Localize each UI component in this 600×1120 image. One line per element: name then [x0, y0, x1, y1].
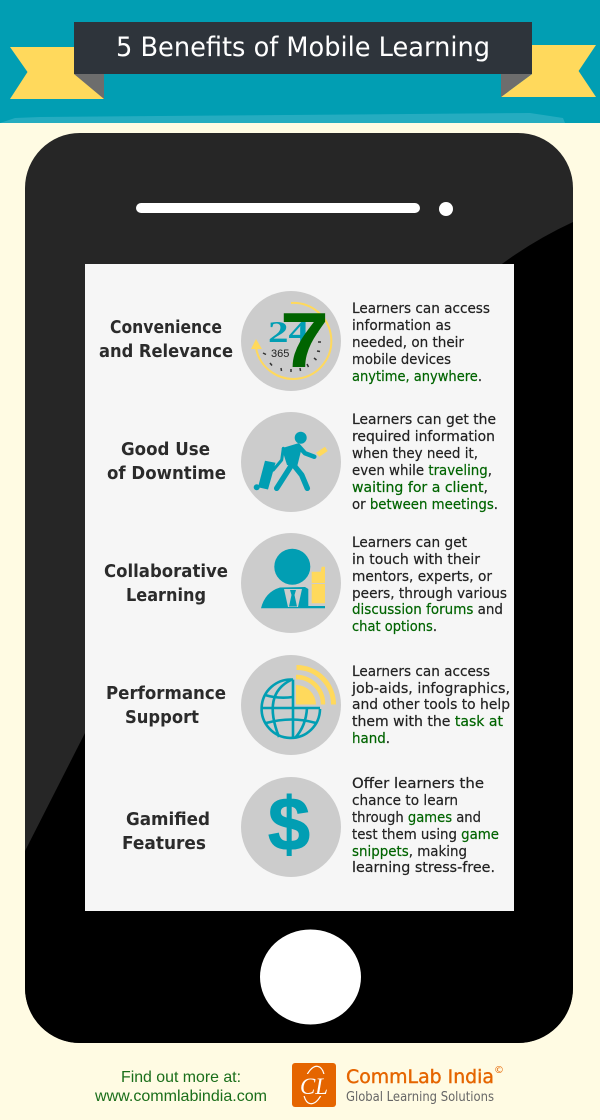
icon: person with phone: [241, 533, 341, 633]
logo wordmark: CommLab India: [346, 1066, 494, 1088]
description: [351, 664, 510, 747]
description: peers, through various: [352, 586, 507, 602]
title banner: 5 Benefits of Mobile Learning: [116, 32, 490, 63]
icon: 24/7/365 clock: [241, 291, 341, 391]
description: learning stress-free.: [352, 860, 495, 876]
heading: and Relevance: [99, 341, 233, 362]
description: chance to learn: [352, 793, 458, 809]
heading: [106, 683, 226, 728]
description: through games and: [352, 810, 481, 826]
logo mark: [292, 1063, 336, 1107]
heading: Support: [125, 707, 199, 728]
phone speaker: [136, 203, 420, 213]
description: [352, 776, 499, 876]
description: test them using game: [352, 827, 499, 843]
description: even while traveling,: [352, 463, 492, 479]
description: needed, on their: [352, 335, 464, 351]
description: chat options.: [352, 619, 437, 635]
footer link text: Find out more at:: [121, 1069, 241, 1086]
icon: globe with signal waves: [241, 655, 341, 755]
heading: [107, 439, 226, 484]
footer link text: [94, 1069, 267, 1105]
heading: [104, 561, 228, 606]
header band: [0, 0, 600, 123]
left ribbon tail: [10, 47, 104, 99]
benefit 1: convenience and relevance: [99, 291, 490, 391]
icon: dollar sign: $: [268, 782, 310, 866]
benefit 4: performance support: [106, 655, 510, 755]
title banner: [74, 22, 532, 74]
CommLab India logo: [292, 1063, 504, 1107]
phone body: [25, 133, 573, 1043]
description: [352, 412, 498, 513]
icon: 24/7/365 clock: 365: [271, 348, 289, 360]
description: hand.: [352, 731, 390, 747]
description: mobile devices: [352, 352, 451, 368]
icon: traveller with suitcase: [241, 412, 341, 512]
description: job-aids, infographics,: [351, 681, 510, 697]
description: them with the task at: [352, 714, 504, 730]
description: and other tools to help: [352, 697, 510, 713]
icon: 24/7/365 clock: 7: [280, 296, 329, 384]
icon: dollar sign: [241, 777, 341, 877]
heading: of Downtime: [107, 463, 226, 484]
heading: Gamified: [126, 809, 210, 830]
description: information as: [352, 318, 451, 334]
right ribbon tail: [501, 45, 596, 97]
description: discussion forums and: [352, 602, 503, 618]
description: in touch with their: [352, 552, 480, 568]
description: mentors, experts, or: [352, 569, 492, 585]
description: when they need it,: [352, 446, 478, 462]
description: [352, 535, 507, 635]
logo wordmark: Global Learning Solutions: [346, 1090, 494, 1105]
heading: Good Use: [121, 439, 210, 460]
benefit 3: collaborative learning: [104, 533, 507, 635]
description: snippets, making: [352, 844, 467, 860]
heading: [122, 809, 210, 854]
title ribbon: [10, 22, 596, 99]
benefit 2: good use of downtime: [107, 412, 498, 513]
phone home button: [260, 930, 361, 1024]
logo wordmark: ©: [494, 1065, 504, 1076]
description: required information: [352, 429, 495, 445]
description: Learners can get: [352, 535, 467, 551]
heading: [99, 317, 233, 362]
phone screen panel: [85, 264, 514, 911]
description: Learners can access: [352, 664, 490, 680]
logo mark: CL: [300, 1074, 328, 1099]
logo wordmark: [346, 1065, 504, 1105]
description: or between meetings.: [352, 497, 498, 513]
icon: 24/7/365 clock: 24: [268, 314, 309, 349]
footer link text: www.commlabindia.com: [94, 1088, 267, 1105]
heading: Learning: [126, 585, 206, 606]
description: anytime, anywhere.: [352, 369, 482, 385]
benefit 5: gamified features: [122, 776, 499, 877]
heading: Features: [122, 833, 206, 854]
description: Offer learners the: [352, 776, 484, 792]
heading: Performance: [106, 683, 226, 704]
description: waiting for a client,: [352, 480, 488, 496]
description: [352, 301, 490, 385]
description: Learners can access: [352, 301, 490, 317]
phone camera: [439, 202, 453, 216]
heading: Collaborative: [104, 561, 228, 582]
heading: Convenience: [110, 317, 222, 338]
description: Learners can get the: [352, 412, 496, 428]
